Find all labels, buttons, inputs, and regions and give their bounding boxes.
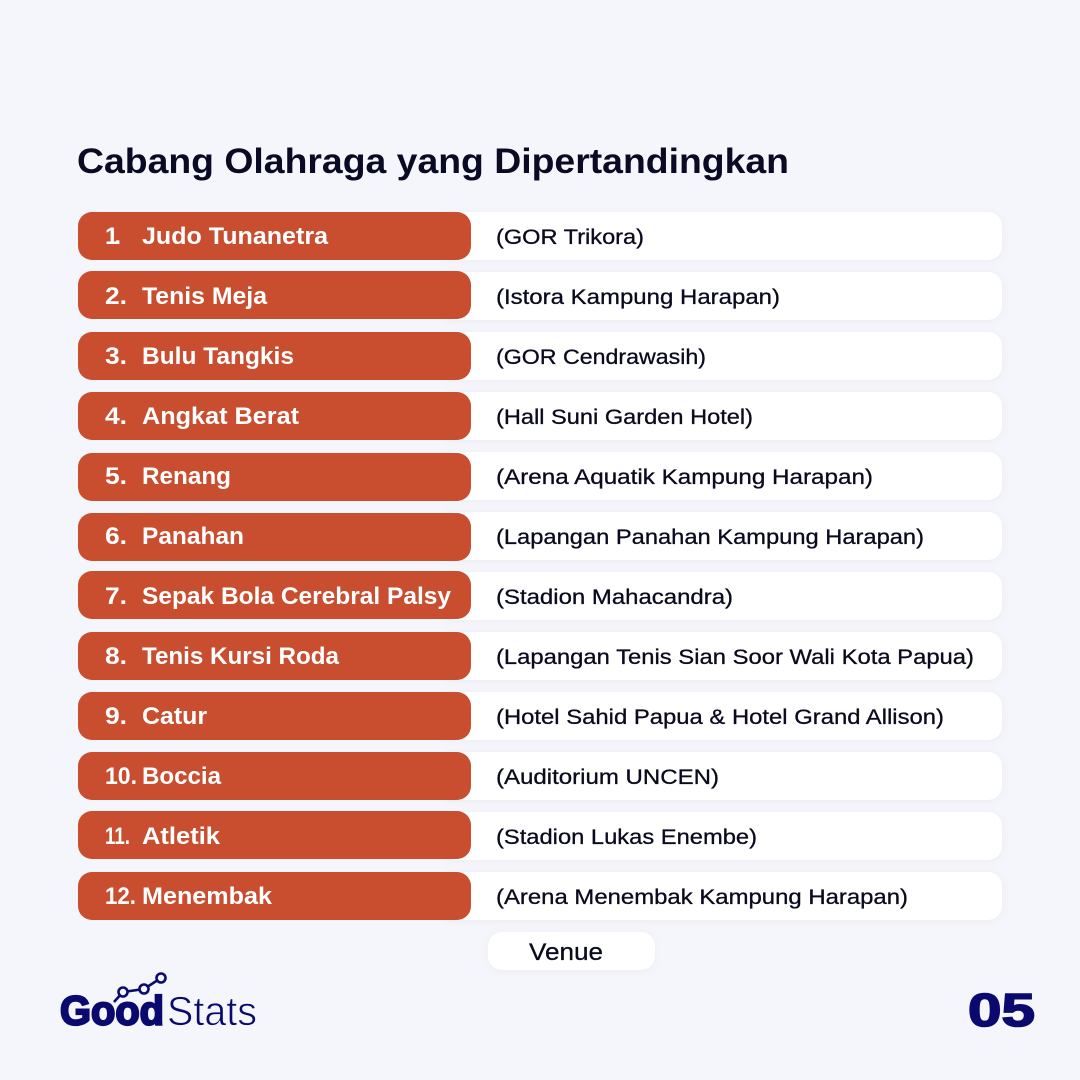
row 5: (Arena Aquatik Kampung Harapan) — [496, 465, 873, 489]
row 12 — [78, 872, 1002, 920]
row 12: Menembak — [142, 883, 273, 910]
row 3: 3. — [105, 343, 127, 370]
row 10: 10. — [105, 763, 137, 790]
row 2: (Istora Kampung Harapan) — [496, 285, 780, 309]
row 9: (Hotel Sahid Papua & Hotel Grand Allison) — [496, 705, 944, 729]
row 11: (Stadion Lukas Enembe) — [496, 825, 757, 849]
row 9: 9. — [105, 703, 127, 730]
page number: 05 — [968, 984, 1035, 1036]
row 9 — [78, 692, 1002, 740]
row 4 — [78, 392, 1002, 440]
row 3 — [78, 332, 1002, 380]
row 5: Renang — [142, 463, 231, 490]
row 8: Tenis Kursi Roda — [142, 643, 340, 670]
row 6 — [78, 512, 1002, 561]
logo: GoodStats — [60, 974, 257, 1034]
logo: GoodStats: Good — [60, 988, 164, 1034]
row 2: 2. — [105, 283, 127, 310]
row 2 — [78, 271, 1002, 320]
row 11: 11. — [105, 823, 130, 850]
row 4: Angkat Berat — [142, 403, 299, 430]
legend: venue: Venue — [529, 939, 603, 966]
row 7 — [78, 571, 1002, 620]
row 12: 12. — [105, 883, 136, 910]
logo: GoodStats: Stats — [167, 988, 257, 1034]
title: Cabang Olahraga yang Dipertandingkan — [77, 142, 789, 181]
row 3: Bulu Tangkis — [142, 343, 294, 370]
row 10 — [78, 752, 1002, 800]
row 7: 7. — [105, 583, 127, 610]
row 4: (Hall Suni Garden Hotel) — [496, 405, 753, 429]
row 5: 5. — [105, 463, 127, 490]
row 12: (Arena Menembak Kampung Harapan) — [496, 885, 908, 909]
row 6: (Lapangan Panahan Kampung Harapan) — [496, 525, 924, 549]
row 4: 4. — [105, 403, 127, 430]
row 10: (Auditorium UNCEN) — [496, 765, 719, 789]
row 9: Catur — [142, 703, 207, 730]
legend: venue — [488, 932, 655, 970]
row 7: Sepak Bola Cerebral Palsy — [142, 583, 452, 610]
row 1: (GOR Trikora) — [496, 225, 644, 249]
row 1 — [78, 212, 1002, 260]
row 1: 1. — [105, 223, 121, 250]
row 11 — [78, 811, 1002, 860]
row 5 — [78, 452, 1002, 501]
row 7: (Stadion Mahacandra) — [496, 585, 733, 609]
row 6: Panahan — [142, 523, 244, 550]
row 8 — [78, 632, 1002, 680]
row 6: 6. — [105, 523, 127, 550]
row 11: Atletik — [142, 823, 221, 850]
row 3: (GOR Cendrawasih) — [496, 345, 706, 369]
row 10: Boccia — [142, 763, 222, 790]
row 2: Tenis Meja — [142, 283, 268, 310]
row 8: 8. — [105, 643, 127, 670]
row 1: Judo Tunanetra — [142, 223, 329, 250]
row 8: (Lapangan Tenis Sian Soor Wali Kota Papua) — [496, 645, 974, 669]
